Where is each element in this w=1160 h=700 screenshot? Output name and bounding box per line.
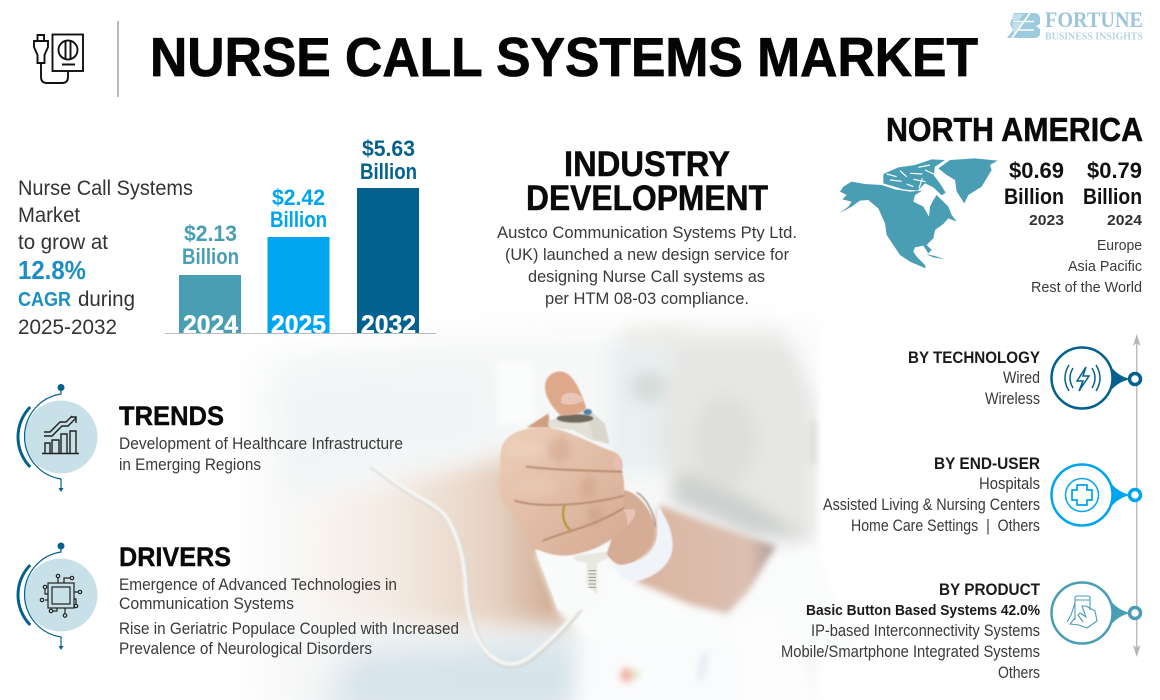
heading: industry development: INDUSTRY	[564, 145, 730, 184]
segment axis arrow	[1133, 334, 1140, 657]
bar 2024	[179, 221, 241, 339]
bar 2024: $2.13	[184, 221, 237, 246]
stat: north america 2024: 2024	[1107, 212, 1143, 229]
header divider	[117, 21, 119, 97]
growth statement: 12.8%	[18, 255, 86, 285]
icon: wireless bolt	[1052, 348, 1140, 408]
icon: medical cross	[1052, 464, 1140, 526]
stat: north america 2023: $0.69	[1009, 158, 1064, 183]
block: by technology: Wireless	[985, 390, 1040, 408]
text block: drivers detail	[119, 576, 459, 658]
block: by end-user: Assisted Living & Nursing Centers	[823, 496, 1040, 514]
block: by product: Mobile/Smartphone Integrated Systems	[781, 643, 1040, 661]
icon: trends chart in circle	[18, 384, 98, 492]
block: by technology: Wired	[1003, 369, 1040, 387]
bar 2025: $2.42	[272, 185, 325, 210]
logo: Fortune Business Insights: BUSINESS INSIGHTS	[1045, 32, 1143, 42]
heading: trends: TRENDS	[119, 401, 224, 431]
block: by product: Basic Button Based Systems 42.0%	[806, 602, 1040, 619]
icon: hand holding smartphone	[1052, 582, 1140, 644]
map: north america	[839, 158, 998, 268]
heading: north america: NORTH AMERICA	[886, 111, 1143, 148]
block: by end-user: Hospitals	[979, 475, 1040, 493]
title: NURSE CALL SYSTEMS MARKET	[150, 26, 978, 88]
call button cord	[373, 466, 594, 666]
stat: north america 2023: Billion	[1004, 184, 1064, 209]
text block: drivers detail: Rise in Geriatric Populace Coupled with Increased	[119, 620, 459, 638]
hand and remote	[499, 372, 673, 610]
bar 2032	[357, 136, 419, 339]
stat: north america 2024: Billion	[1083, 184, 1142, 209]
block: by product: IP-based Interconnectivity Systems	[811, 622, 1040, 640]
list: other regions: Rest of the World	[1031, 279, 1142, 296]
logo: Fortune Business Insights	[1007, 7, 1143, 42]
background photo: hand pressing nurse call button	[215, 290, 880, 700]
heading: industry development	[526, 145, 768, 218]
heading: drivers: DRIVERS	[119, 542, 231, 572]
growth statement: CAGR	[18, 289, 71, 311]
icon: drivers microchip in circle	[18, 542, 98, 650]
bar 2032: Billion	[360, 159, 417, 184]
bar 2024: 2024	[183, 311, 238, 339]
bar 2032: $5.63	[362, 136, 415, 161]
text block: industry development detail: designing Nurse Call systems as	[528, 268, 765, 286]
stat: north america 2023: 2023	[1029, 212, 1064, 229]
bar 2025: 2025	[271, 311, 326, 339]
text block: trends detail: in Emerging Regions	[119, 456, 261, 474]
stat: north america 2024	[1083, 158, 1143, 229]
bar 2024: Billion	[182, 244, 239, 269]
bar chart: market size	[165, 136, 436, 339]
block: by product	[781, 581, 1140, 682]
block: by end-user: BY END-USER	[934, 455, 1040, 473]
bar 2025	[268, 185, 330, 339]
block: by end-user	[823, 455, 1140, 535]
bar 2032: 2032	[361, 311, 416, 339]
growth statement: to grow at	[18, 231, 108, 254]
logo: Fortune Business Insights: FORTUNE	[1045, 7, 1143, 32]
text block: industry development detail	[497, 224, 797, 308]
list: other regions: Europe	[1097, 237, 1142, 254]
growth statement	[18, 177, 193, 339]
icon: nurse call wall plate and plug	[34, 34, 83, 83]
heading: industry development: DEVELOPMENT	[526, 179, 768, 218]
text block: trends detail: Development of Healthcare Infrastructure	[119, 435, 403, 453]
text block: trends detail	[119, 435, 403, 474]
block: by technology	[908, 348, 1140, 408]
growth statement: during	[78, 288, 135, 311]
block: by product: BY PRODUCT	[939, 581, 1040, 599]
block: by technology: BY TECHNOLOGY	[908, 349, 1040, 367]
bar 2025: Billion	[270, 207, 327, 232]
stat: north america 2023	[1004, 158, 1064, 229]
growth statement: Market	[18, 204, 80, 227]
text block: drivers detail: Emergence of Advanced Technologies in	[119, 576, 397, 594]
text block: industry development detail: per HTM 08-03 compliance.	[545, 290, 749, 308]
text block: industry development detail: Austco Communication Systems Pty Ltd.	[497, 224, 797, 242]
list: other regions	[1031, 237, 1142, 296]
stat: north america 2024: $0.79	[1087, 158, 1142, 183]
growth statement: 2025-2032	[18, 316, 117, 339]
block: by end-user: Home Care Settings | Others	[851, 517, 1040, 535]
list: other regions: Asia Pacific	[1068, 258, 1142, 275]
text block: industry development detail: (UK) launched a new design service for	[505, 246, 789, 264]
block: by product: Others	[998, 664, 1040, 682]
text block: drivers detail: Prevalence of Neurological Disorders	[119, 640, 372, 658]
wedding ring	[563, 505, 571, 530]
image fades into white page	[215, 300, 300, 700]
text block: drivers detail: Communication Systems	[119, 595, 294, 613]
growth statement: Nurse Call Systems	[18, 177, 193, 200]
